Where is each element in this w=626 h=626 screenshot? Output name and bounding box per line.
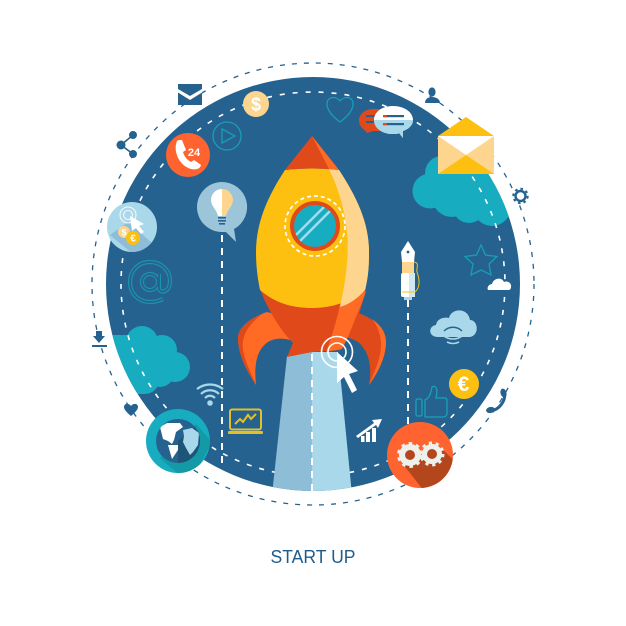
icon: wifi	[197, 384, 223, 405]
rocket: lower section	[260, 288, 366, 357]
rocket: nose highlight	[312, 136, 339, 170]
icon: at sign	[130, 262, 170, 302]
icon: fountain pen	[401, 241, 419, 300]
icon: euro coin: €	[458, 373, 470, 396]
gear: left	[398, 444, 422, 466]
icon: click cursor	[322, 336, 358, 393]
icon: phone 24: 24	[188, 147, 201, 159]
rocket: window ring	[285, 196, 345, 256]
icon: touch and coins: €	[130, 234, 136, 244]
icon: download	[92, 331, 107, 347]
icon: gears circle	[387, 422, 453, 488]
icon: solid heart	[124, 404, 138, 416]
rocket: right fin edge	[369, 319, 386, 385]
rocket: window glass	[294, 205, 336, 247]
rocket: window frame	[290, 201, 340, 251]
icon: touch and coins	[107, 202, 157, 252]
title: START UP	[270, 547, 356, 567]
rocket: lower light section	[326, 291, 366, 352]
cloud: lower left	[112, 326, 190, 394]
icon: wifi cloud	[430, 310, 477, 344]
icon: globe circle	[146, 409, 210, 473]
icon: mail top left	[178, 84, 202, 105]
icon: euro coin	[449, 369, 479, 399]
main blue circle	[106, 77, 520, 491]
rocket: yellow body	[256, 168, 369, 308]
icon: phone handset right	[486, 388, 508, 414]
icon: laptop chart	[228, 410, 263, 434]
icon: idea bulb bubble	[197, 182, 247, 242]
icon: user	[425, 87, 440, 103]
rocket	[238, 136, 386, 385]
icon: open envelope	[438, 117, 494, 174]
rocket: left fin edge	[238, 314, 262, 385]
icon: gear	[513, 189, 528, 203]
icon: speech bubbles	[359, 106, 413, 138]
flame: right half	[312, 352, 352, 495]
rocket: glass reflection	[296, 207, 331, 241]
icon: dollar coin: $	[251, 94, 261, 114]
cloud: upper right	[412, 156, 509, 226]
icon: growth chart	[356, 419, 382, 442]
clouds: teal background clouds	[100, 156, 530, 394]
icon: heart outline	[327, 98, 353, 122]
rocket: left fin	[238, 312, 295, 385]
icon: dollar coin	[243, 91, 269, 117]
icon: small white cloud	[488, 279, 511, 290]
outer dashed orbit	[92, 63, 534, 505]
icon: phone 24	[166, 133, 210, 177]
gear: right	[421, 443, 443, 465]
icon: star outline	[465, 245, 497, 275]
inner dashed orbit	[121, 92, 505, 476]
icon: play button	[213, 122, 241, 150]
infographic: start up rocket	[91, 62, 535, 563]
rocket: body highlight	[329, 169, 369, 307]
rocket: right fin	[330, 312, 386, 385]
rocket: nose cone	[285, 136, 339, 170]
icon: thumbs up outline	[416, 386, 447, 417]
flame: left half	[272, 352, 312, 495]
rocket flame beam	[272, 352, 352, 495]
icon: share	[117, 132, 136, 158]
icon: touch and coins: $	[121, 228, 127, 238]
dashed vertical lines	[222, 235, 408, 491]
